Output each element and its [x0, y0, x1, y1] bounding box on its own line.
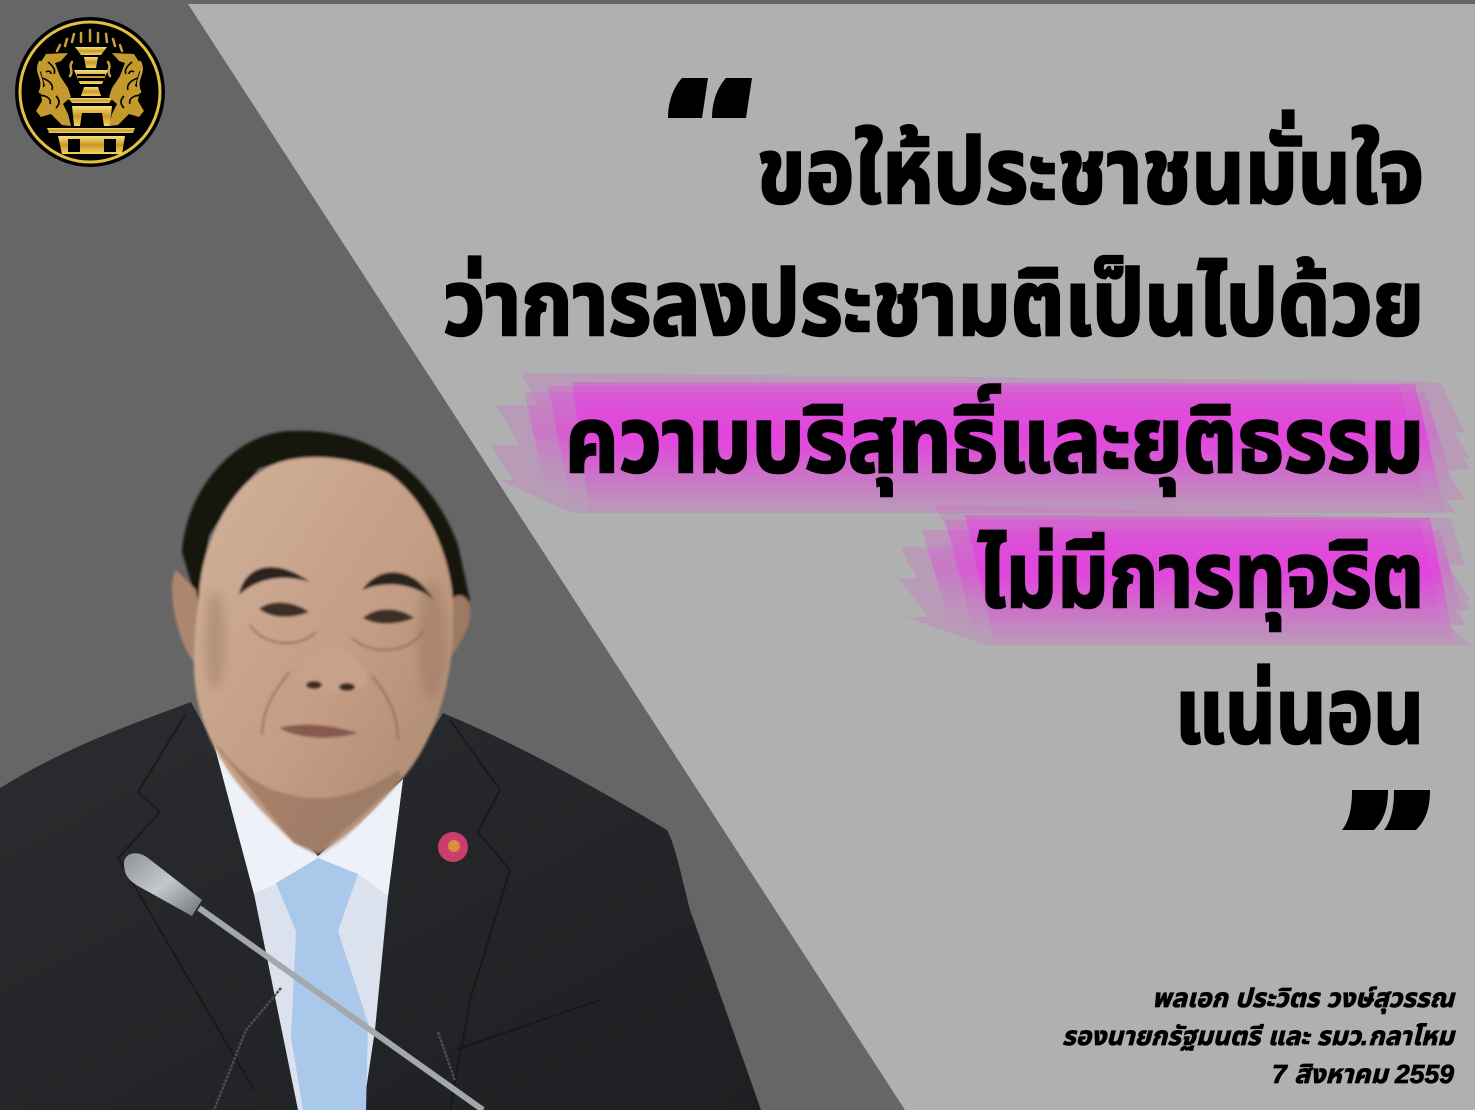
attribution	[1062, 983, 1456, 1089]
portrait: eyes	[259, 602, 414, 624]
attribution: position: รองนายกรัฐมนตรี และ รมว.กลาโหม	[1062, 1021, 1456, 1051]
portrait: hair	[182, 431, 470, 640]
quote mark: opening	[668, 78, 752, 118]
quote line 5: แน่นอน	[1175, 661, 1424, 763]
seal: flames	[38, 30, 142, 92]
portrait: shirt	[214, 744, 403, 1110]
portrait: microphone head	[124, 853, 202, 916]
portrait: left ear	[172, 570, 206, 662]
portrait: jacket	[0, 702, 761, 1110]
portrait: mouth	[279, 725, 358, 738]
portrait: eye bags and smile lines	[250, 625, 424, 740]
quote text	[443, 110, 1424, 763]
seal: urn	[47, 47, 135, 154]
portrait: head	[172, 431, 470, 854]
portrait: nostrils	[306, 681, 355, 691]
quote mark: closing	[1342, 790, 1430, 830]
portrait: face shading	[205, 580, 446, 700]
seal: right lion	[109, 53, 144, 126]
highlight: brush stroke behind line 4	[898, 505, 1470, 645]
portrait: right ear	[450, 595, 470, 658]
attribution: date: 7 สิงหาคม 2559	[1272, 1059, 1455, 1089]
portrait: face and neck	[194, 457, 453, 854]
portrait: tie	[276, 858, 368, 1110]
portrait: jacket lapels	[118, 715, 600, 1110]
portrait: nose	[296, 648, 368, 692]
highlight: brush stroke behind line 3	[490, 373, 1470, 513]
seal: government emblem	[15, 17, 165, 167]
portrait: man at microphone	[0, 431, 761, 1110]
seal: left lion	[36, 53, 71, 126]
portrait: lapel pin	[438, 832, 468, 862]
portrait: shirt collar	[214, 744, 403, 896]
portrait: neck shadow	[214, 744, 402, 854]
portrait: eyebrows	[239, 567, 434, 600]
attribution: name: พลเอก ประวิตร วงษ์สุวรรณ	[1152, 983, 1456, 1014]
portrait: microphone pole	[199, 908, 483, 1110]
seal: urn and plinth detail	[68, 74, 116, 152]
portrait: microphone wires	[214, 988, 455, 1110]
